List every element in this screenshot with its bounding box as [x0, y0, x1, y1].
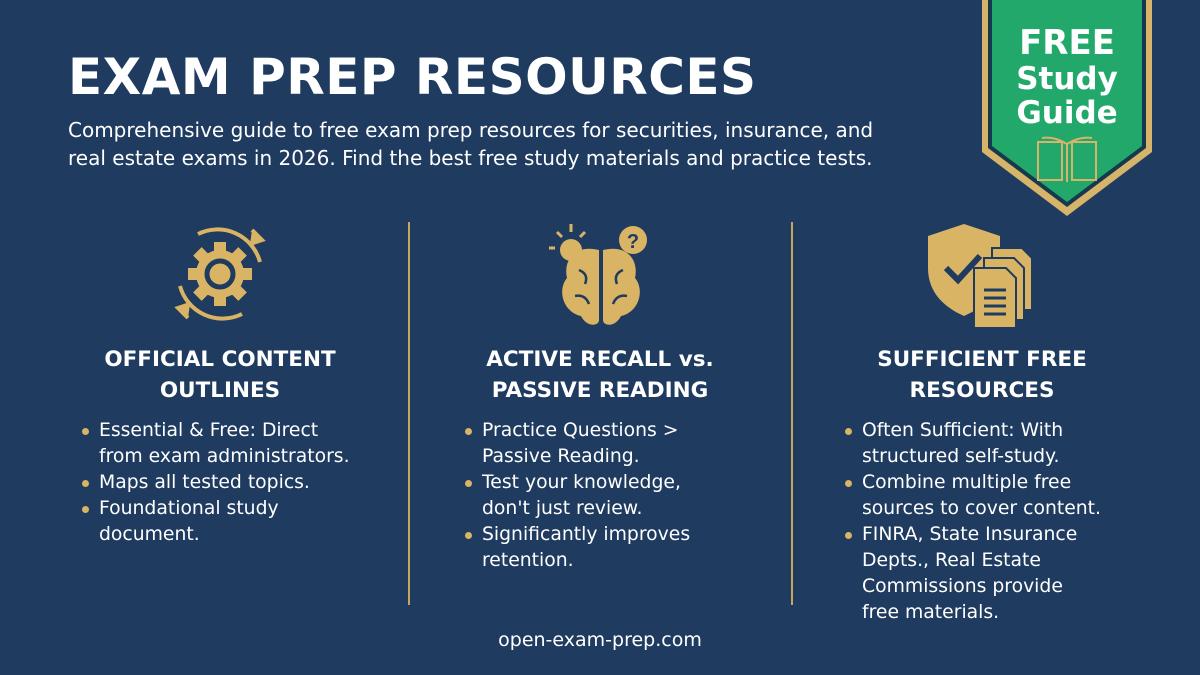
panel: official content outlines: OUTLINES — [160, 378, 280, 403]
panel: active recall — [465, 347, 714, 571]
panel: sufficient free resources: RESOURCES — [910, 378, 1054, 403]
panel: sufficient free resources: Combine multiple free sources to cover content. — [862, 472, 1101, 519]
badge: free study guide: Study — [1016, 61, 1118, 97]
footer url: open-exam-prep.com — [498, 629, 702, 651]
badge: free study guide — [982, 0, 1152, 216]
icon: gear cycle — [174, 227, 266, 321]
panel: active recall: PASSIVE READING — [492, 378, 708, 403]
panel: official content outlines — [82, 347, 350, 545]
icon: brain with idea — [549, 224, 647, 325]
badge: free study guide: FREE — [1019, 23, 1115, 63]
panel: active recall: Test your knowledge, don't just review. — [482, 472, 681, 519]
subtitle: Comprehensive guide to free exam prep resources for securities, insurance, and — [68, 118, 873, 142]
title: EXAM PREP RESOURCES — [68, 48, 757, 106]
panel: active recall: ACTIVE RECALL vs. — [486, 347, 714, 372]
subtitle: real estate exams in 2026. Find the best free study materials and practice tests. — [68, 146, 872, 170]
subtitle — [68, 118, 873, 170]
panel: sufficient free resources — [845, 347, 1101, 623]
icon: book — [1038, 138, 1096, 182]
panel: active recall: Significantly improves retention. — [482, 524, 690, 571]
panel: sufficient free resources: SUFFICIENT FREE — [877, 347, 1087, 372]
panel: sufficient free resources: Often Sufficient: With structured self-study. — [862, 420, 1063, 467]
panel: sufficient free resources: FINRA, State Insurance Depts., Real Estate Commissions provide free materials. — [862, 524, 1077, 623]
badge: free study guide: Guide — [1016, 95, 1118, 131]
icon: shield with documents — [928, 224, 1031, 327]
panel: official content outlines: OFFICIAL CONTENT — [104, 347, 336, 372]
panel: active recall: Practice Questions > Passive Reading. — [482, 420, 678, 467]
panel: official content outlines: Essential & Free: Direct from exam administrators. — [99, 420, 350, 467]
panel: official content outlines: Foundational study document. — [99, 498, 279, 545]
icon: brain with idea: ? — [627, 231, 639, 253]
panel: official content outlines: Maps all tested topics. — [99, 472, 310, 493]
